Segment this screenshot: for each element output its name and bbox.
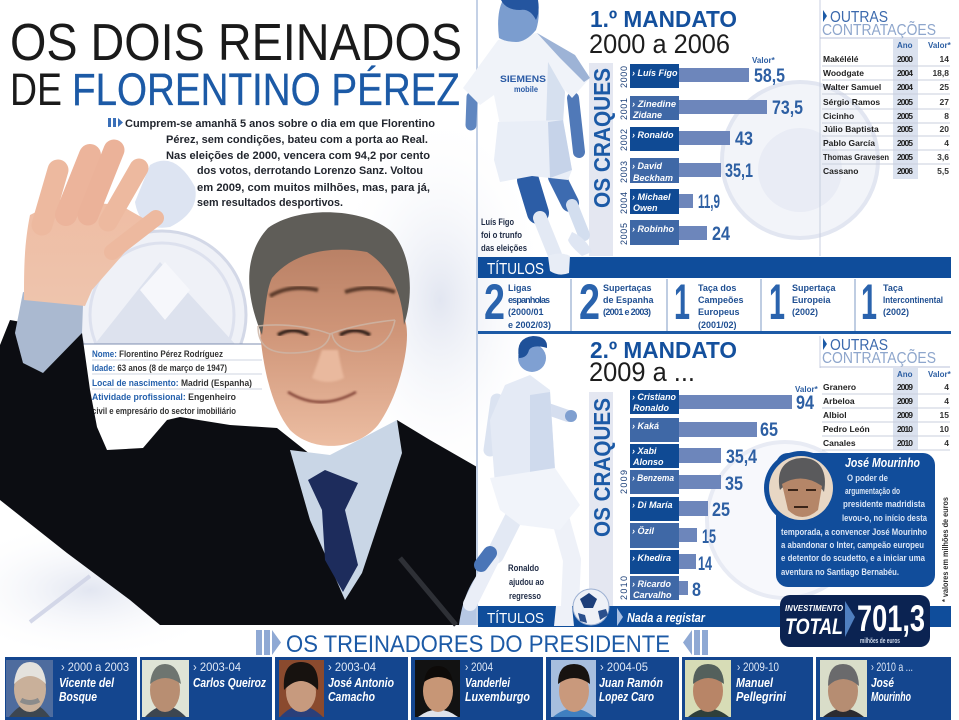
heading: 2.º mandato: 2.º MANDATO bbox=[590, 337, 737, 363]
head bbox=[249, 212, 410, 446]
trophy: supertaça europeia: (2002) bbox=[792, 307, 818, 317]
panel: outras contratações 2: CONTRATAÇÕES bbox=[822, 347, 936, 367]
card: Carlos Queiroz: Carlos Queiroz bbox=[193, 675, 266, 690]
panel: outras contratações 2: 2010 bbox=[897, 424, 913, 434]
year markers: 2004 bbox=[619, 192, 629, 214]
panel: investimento total: 701,3 bbox=[857, 598, 925, 639]
bio box: Local de nascimento: Madrid (Espanha) bbox=[92, 378, 252, 389]
panel: outras contratações 2: Ano bbox=[897, 370, 913, 379]
suit bbox=[0, 320, 477, 625]
bar chart: second term transfers bbox=[619, 385, 819, 601]
values: 58,5 bbox=[754, 66, 785, 87]
shirt and shorts bbox=[490, 375, 555, 485]
year markers bbox=[619, 470, 629, 600]
heading: 2.º mandato: 2009 a ... bbox=[589, 357, 695, 387]
player labels: › Özil bbox=[632, 526, 654, 536]
intro text bbox=[108, 118, 435, 209]
head bbox=[518, 344, 546, 372]
panel: outras contratações 1: 2005 bbox=[897, 97, 913, 107]
bio box: civil e empresário do sector imobiliário bbox=[92, 406, 236, 417]
year markers: 2010 bbox=[619, 576, 629, 600]
panel: outras contratações 2: 15 bbox=[940, 410, 949, 420]
panel: outras contratações 2: 2010 bbox=[897, 438, 913, 448]
trophy: supertaças: de Espanha bbox=[603, 295, 655, 305]
trophy: campeões: (2001/02) bbox=[698, 320, 737, 330]
portrait bbox=[6, 660, 53, 717]
panel: outras contratações 2 bbox=[822, 337, 952, 450]
card: José Antonio Camacho: José Antonio bbox=[328, 675, 394, 690]
card: José Mourinho: José bbox=[871, 675, 894, 690]
card: Carlos Queiroz bbox=[140, 657, 272, 720]
panel: José Mourinho: presidente madridista bbox=[843, 499, 926, 509]
player labels: › Xabi bbox=[632, 446, 657, 456]
panel: outras contratações 1: 18,8 bbox=[932, 68, 949, 78]
card: Carlos Queiroz: › 2003-04 bbox=[193, 660, 241, 674]
heading: 1.º mandato bbox=[589, 6, 737, 59]
values bbox=[698, 66, 803, 245]
trophy: supertaça europeia: Europeia bbox=[792, 295, 832, 305]
card: Manuel Pellegrini: › 2009-10 bbox=[737, 660, 779, 674]
panel: títulos bar 1: TÍTULOS bbox=[487, 259, 544, 278]
year markers: 2003 bbox=[619, 161, 629, 183]
portrait bbox=[551, 660, 596, 717]
values: 35,4 bbox=[726, 447, 757, 468]
player labels bbox=[630, 390, 679, 600]
trophy: ligas: (2000/01 bbox=[508, 307, 544, 317]
title: FLORENTINO PÉREZ bbox=[72, 64, 460, 115]
player labels: › Cristiano bbox=[632, 392, 676, 402]
panel: outras contratações 1 bbox=[822, 9, 952, 179]
card: Juan Ramón Lopez Caro: Juan Ramón bbox=[599, 675, 663, 690]
trophy: ligas bbox=[484, 274, 551, 330]
icon: intro chevrons bbox=[108, 118, 123, 127]
panel: outras contratações 2: 4 bbox=[944, 382, 949, 392]
vertical heading: os craques 2: OS CRAQUES bbox=[589, 398, 615, 537]
panel: outras contratações 1: 2005 bbox=[897, 111, 913, 121]
player labels: › Michael bbox=[632, 192, 671, 202]
card: Manuel Pellegrini: Pellegrini bbox=[736, 689, 786, 704]
card: Manuel Pellegrini: Manuel bbox=[736, 675, 773, 690]
card: Vanderlei Luxemburgo: › 2004 bbox=[465, 660, 493, 674]
trophy: supertaça europeia: 1 bbox=[769, 274, 785, 330]
panel: José Mourinho bbox=[764, 451, 935, 587]
year markers: 2005 bbox=[619, 223, 629, 245]
card: José Mourinho bbox=[816, 657, 951, 720]
panel: outras contratações 2: 2009 bbox=[897, 382, 913, 392]
portrait bbox=[415, 660, 460, 717]
photo: Mourinho bbox=[764, 451, 838, 525]
panel: outras contratações 1: Pablo García bbox=[823, 138, 875, 148]
trophy: campeões: Europeus bbox=[698, 307, 740, 317]
values: 11,9 bbox=[698, 192, 720, 213]
panel: José Mourinho: temporada, a convencer José Mourinho bbox=[781, 527, 927, 537]
panel: outras contratações 2: 10 bbox=[940, 424, 949, 434]
trophy: ligas: e 2002/03) bbox=[508, 320, 551, 330]
player labels: › David bbox=[632, 161, 663, 171]
caption: Ronaldo: regresso bbox=[509, 591, 541, 601]
trophy: supertaça europeia: Supertaça bbox=[792, 283, 837, 293]
card: Vanderlei Luxemburgo: Vanderlei bbox=[465, 675, 510, 690]
trophy: supertaças: (2001 e 2003) bbox=[603, 307, 651, 317]
arms bbox=[471, 97, 472, 125]
player labels: Ronaldo bbox=[633, 403, 669, 413]
year markers: 2002 bbox=[619, 129, 629, 151]
title: OS DOIS REINADOS bbox=[10, 14, 462, 72]
card: José Antonio Camacho: Camacho bbox=[328, 689, 375, 704]
panel: José Mourinho: levou-o, no início desta bbox=[842, 513, 928, 523]
panel: outras contratações 1: 3,6 bbox=[937, 152, 949, 162]
arms bbox=[545, 408, 568, 416]
panel: outras contratações 1: 5,5 bbox=[937, 166, 949, 176]
portrait bbox=[279, 660, 324, 717]
panel: outras contratações 1: 14 bbox=[940, 54, 949, 64]
values: 8 bbox=[692, 580, 701, 601]
panel: José Mourinho: a abandonar o Inter, campeão europeu bbox=[781, 540, 924, 550]
panel: outras contratações 2: Albiol bbox=[823, 410, 847, 420]
player labels: › Zinedine bbox=[632, 99, 676, 109]
intro text: Nas eleições de 2000, vencera com 94,2 por cento bbox=[166, 150, 430, 162]
caption: Figo bbox=[481, 217, 527, 253]
card: Vicente del Bosque bbox=[5, 657, 137, 720]
portrait bbox=[685, 660, 731, 717]
panel: outras contratações 1: Thomas Gravesen bbox=[823, 152, 889, 162]
panel: outras contratações 1: 4 bbox=[944, 138, 949, 148]
panel: títulos bar 2 bbox=[478, 606, 951, 627]
panel: left background with crest bbox=[20, 160, 492, 624]
microphone bbox=[400, 558, 456, 625]
intro text: dos votos, derrotando Lorenzo Sanz. Voltou bbox=[197, 165, 423, 177]
player labels: › Di María bbox=[632, 500, 673, 510]
panel: outras contratações 2: Arbeloa bbox=[823, 396, 855, 406]
player labels: › Benzema bbox=[632, 473, 674, 483]
trophy: campeões bbox=[674, 274, 744, 330]
intro text: em 2009, com muitos milhões, mas, para já, bbox=[197, 182, 430, 194]
card: Juan Ramón Lopez Caro: › 2004-05 bbox=[600, 660, 648, 674]
player labels: Zidane bbox=[632, 110, 662, 120]
bar chart: second term transfers: Valor* bbox=[795, 385, 819, 394]
values: 94 bbox=[796, 393, 814, 414]
panel: outras contratações 1: OUTRAS bbox=[830, 9, 888, 26]
heading: os treinadores do presidente: OS TREINADORES DO PRESIDENTE bbox=[286, 631, 670, 658]
vertical heading: os craques 1: OS CRAQUES bbox=[589, 68, 615, 208]
heading: 1.º mandato: 1.º MANDATO bbox=[590, 6, 737, 32]
shirt cuff bbox=[15, 292, 83, 373]
photo: Luís Figo: mobile bbox=[514, 84, 538, 94]
heading: 1.º mandato: 2000 a 2006 bbox=[589, 29, 730, 59]
panel: outras contratações 1: Sérgio Ramos bbox=[823, 97, 880, 107]
caption: Ronaldo: Ronaldo bbox=[508, 563, 539, 573]
trophy: intercontinental: (2002) bbox=[883, 307, 909, 317]
panel: outras contratações 1: CONTRATAÇÕES bbox=[822, 19, 936, 39]
panel: outras contratações 1: 2004 bbox=[897, 82, 913, 92]
head bbox=[498, 0, 539, 42]
card: José Mourinho: › 2010 a ... bbox=[871, 660, 913, 674]
panel: outras contratações 1: Walter Samuel bbox=[823, 82, 881, 92]
heading: 2.º mandato bbox=[589, 337, 737, 387]
card: Juan Ramón Lopez Caro: Lopez Caro bbox=[599, 689, 654, 704]
player labels: Owen bbox=[633, 203, 658, 213]
trophy: campeões: 1 bbox=[674, 274, 690, 330]
panel: outras contratações 1: 8 bbox=[944, 111, 949, 121]
panel: outras contratações 2: Pedro León bbox=[823, 424, 870, 434]
card: Vanderlei Luxemburgo: Luxemburgo bbox=[465, 689, 530, 704]
photo: Luís Figo bbox=[463, 0, 592, 256]
shirt bbox=[463, 33, 590, 125]
caption: Ronaldo: ajudou ao bbox=[509, 577, 544, 587]
panel: títulos bar 1 bbox=[478, 257, 951, 278]
photo: Cristiano Ronaldo bbox=[470, 336, 580, 605]
panel: investimento total: TOTAL bbox=[785, 614, 843, 639]
card: Vicente del Bosque: › 2000 a 2003 bbox=[61, 660, 129, 674]
photo: Florentino Pérez waving bbox=[0, 150, 477, 625]
panel: outras contratações 1: 20 bbox=[940, 124, 949, 134]
icon: football and boot bbox=[554, 589, 609, 626]
values: 14 bbox=[698, 554, 712, 575]
trophy: intercontinental: 1 bbox=[861, 274, 877, 330]
values: 24 bbox=[712, 224, 730, 245]
hand bbox=[24, 150, 156, 306]
intro text: Cumprem-se amanhã 5 anos sobre o dia em que Florentino bbox=[125, 118, 435, 130]
shorts bbox=[494, 120, 572, 182]
trophy: ligas: Ligas bbox=[508, 283, 532, 293]
panel: investimento total bbox=[780, 595, 930, 647]
panel: outras contratações 1: Woodgate bbox=[823, 68, 864, 78]
bars bbox=[679, 395, 792, 595]
trophy: campeões: Taça dos bbox=[698, 283, 736, 293]
panel: José Mourinho: argumentação do bbox=[845, 486, 900, 496]
panel: títulos bar 2: Nada a registar bbox=[627, 610, 706, 625]
legs bbox=[495, 515, 515, 555]
panel: títulos bar 2: TÍTULOS bbox=[487, 610, 544, 627]
panel: right column frame and crests bbox=[476, 0, 950, 625]
panel: outras contratações 1: 2005 bbox=[897, 152, 913, 162]
values: 15 bbox=[702, 527, 716, 548]
photo: Figo boot bbox=[548, 254, 570, 275]
card: Juan Ramón Lopez Caro bbox=[546, 657, 679, 720]
values: 73,5 bbox=[772, 98, 803, 119]
panel: outras contratações 1: 2005 bbox=[897, 124, 913, 134]
panel: investimento total: milhões de euros bbox=[860, 636, 900, 645]
player labels: › Luís Figo bbox=[632, 68, 678, 78]
values: 35,1 bbox=[725, 161, 753, 182]
values: 43 bbox=[735, 129, 753, 150]
trophy: supertaças: 2 bbox=[579, 274, 600, 330]
bio box bbox=[83, 344, 263, 417]
bio box: Nome: Florentino Pérez Rodríguez bbox=[92, 349, 223, 360]
card: Manuel Pellegrini bbox=[682, 657, 813, 720]
panel: outras contratações 1: Makélélé bbox=[823, 54, 859, 64]
card: Vicente del Bosque: Vicente del bbox=[59, 675, 114, 690]
intro text: Pérez, sem condições, bateu com a porta ao Real. bbox=[166, 134, 428, 146]
caption: Figo: foi o trunfo bbox=[481, 230, 522, 240]
bars bbox=[679, 68, 767, 240]
intro text: sem resultados desportivos. bbox=[197, 197, 343, 209]
title: DE bbox=[10, 64, 62, 115]
trophy: supertaça europeia bbox=[769, 274, 837, 330]
panel: outras contratações 1: 2006 bbox=[897, 166, 913, 176]
trophy: supertaças bbox=[579, 274, 655, 330]
panel: outras contratações 2: Canales bbox=[823, 438, 856, 448]
year markers: 2009 bbox=[619, 470, 629, 494]
panel: outras contratações 2: Valor* bbox=[928, 370, 952, 379]
player labels: › Khedira bbox=[632, 553, 671, 563]
panel: outras contratações 2: 4 bbox=[944, 438, 949, 448]
legs bbox=[528, 180, 538, 213]
player labels bbox=[630, 64, 679, 245]
title bbox=[10, 14, 462, 115]
tie bbox=[308, 470, 358, 592]
panel: outras contratações 2: 4 bbox=[944, 396, 949, 406]
card: José Antonio Camacho bbox=[275, 657, 408, 720]
values bbox=[692, 393, 814, 601]
trophy: ligas: espanholas bbox=[508, 295, 550, 305]
caption: Figo: das eleições bbox=[481, 243, 527, 253]
caption: Figo: Luís Figo bbox=[481, 217, 514, 227]
player labels: › Ronaldo bbox=[632, 130, 674, 140]
trophy: supertaças: Supertaças bbox=[603, 283, 652, 293]
card: Vicente del Bosque: Bosque bbox=[59, 689, 97, 704]
footnote: * valores em milhões de euros bbox=[941, 497, 950, 602]
panel: outras contratações 1: Cicinho bbox=[823, 111, 854, 121]
player labels: › Ricardo bbox=[632, 579, 672, 589]
panel: outras contratações 1: 2004 bbox=[897, 68, 913, 78]
year markers: 2001 bbox=[619, 98, 629, 120]
panel: outras contratações 2: 2009 bbox=[897, 410, 913, 420]
panel: José Mourinho: aventura no Santiago Bernabéu. bbox=[781, 567, 899, 577]
portrait bbox=[142, 660, 189, 717]
panel: outras contratações 1: 2000 bbox=[897, 54, 913, 64]
panel: outras contratações 2: 2009 bbox=[897, 396, 913, 406]
panel: outras contratações 1: 27 bbox=[940, 97, 949, 107]
card: José Mourinho: Mourinho bbox=[871, 689, 911, 704]
panel: outras contratações 1: 2005 bbox=[897, 138, 913, 148]
bar chart: first term transfers: Valor* bbox=[752, 56, 776, 65]
panel: trophies row bbox=[478, 274, 951, 334]
panel: investimento total: INVESTIMENTO bbox=[785, 604, 844, 613]
photo: Luís Figo: SIEMENS bbox=[500, 74, 546, 85]
player labels: Beckham bbox=[633, 173, 673, 183]
year markers bbox=[619, 66, 629, 245]
bio box: Idade: 63 anos (8 de março de 1947) bbox=[92, 363, 227, 374]
panel: José Mourinho: O poder de bbox=[847, 473, 888, 483]
caption: Ronaldo bbox=[508, 563, 544, 601]
panel: José Mourinho: e detentor do scudetto, e a iniciar uma bbox=[781, 553, 926, 563]
values: 25 bbox=[712, 500, 730, 521]
trophy: intercontinental: Intercontinental bbox=[883, 295, 943, 305]
shirt collar bbox=[290, 420, 402, 600]
trophy: intercontinental bbox=[861, 274, 943, 330]
portrait bbox=[820, 660, 867, 717]
panel: outras contratações 1: Valor* bbox=[928, 41, 952, 50]
player labels: › Kaká bbox=[632, 421, 659, 431]
player labels: Carvalho bbox=[633, 590, 672, 600]
trophy: intercontinental: Taça bbox=[883, 283, 904, 293]
values: 35 bbox=[725, 474, 743, 495]
bar chart: first term transfers bbox=[619, 56, 803, 245]
year markers: 2000 bbox=[619, 66, 629, 88]
panel: outras contratações 2: Granero bbox=[823, 382, 856, 392]
card: José Antonio Camacho: › 2003-04 bbox=[328, 660, 376, 674]
player labels: Alonso bbox=[632, 457, 664, 467]
trophy: campeões: Campeões bbox=[698, 295, 744, 305]
trophy: ligas: 2 bbox=[484, 274, 505, 330]
panel: outras contratações 1: 25 bbox=[940, 82, 949, 92]
panel: José Mourinho: José Mourinho bbox=[845, 455, 920, 470]
values: 65 bbox=[760, 420, 778, 441]
panel: outras contratações 1: Cassano bbox=[823, 166, 858, 176]
panel: outras contratações 2: OUTRAS bbox=[830, 337, 888, 354]
panel: outras contratações 1: Ano bbox=[897, 41, 913, 50]
bio box: Atividade profissional: Engenheiro bbox=[92, 392, 236, 403]
card: Vanderlei Luxemburgo bbox=[411, 657, 543, 720]
panel: outras contratações 1: Júlio Baptista bbox=[823, 124, 879, 134]
player labels: › Robinho bbox=[632, 224, 674, 234]
